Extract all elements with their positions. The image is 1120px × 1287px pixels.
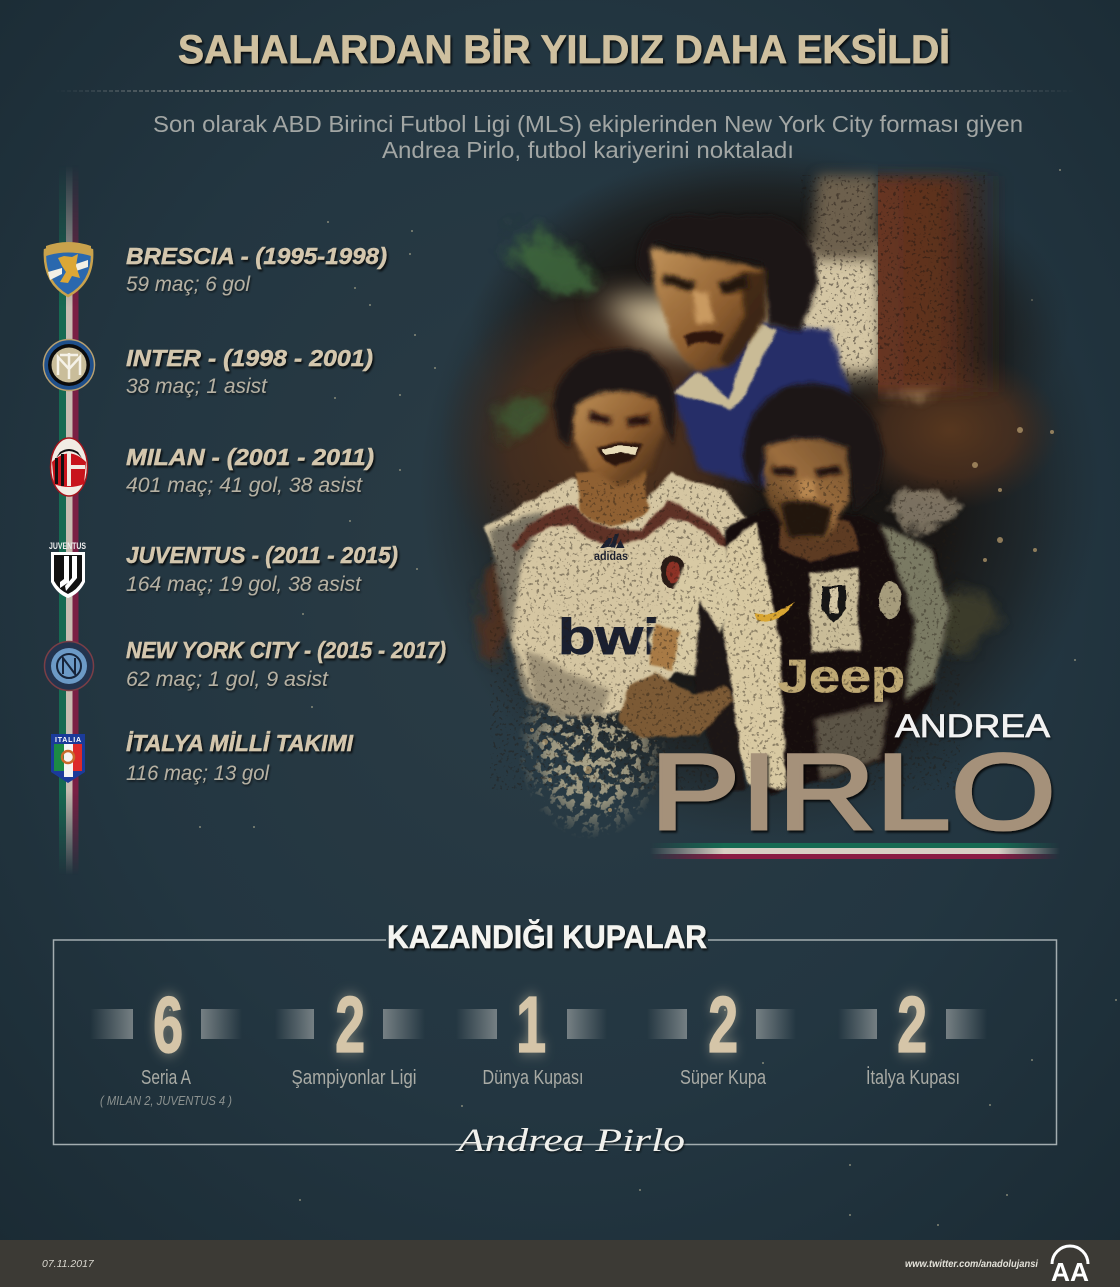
name: Pirlo: PIRLO [650,731,1056,852]
career: Milan [50,438,374,497]
trophy: Dünya Kupası: Dünya Kupası [482,1067,584,1089]
trophy: İtalya Kupası: İtalya Kupası [866,1066,960,1089]
stats: 401 maç; 41 gol, 38 asist [126,474,363,497]
stats: 59 maç; 6 gol [126,273,251,296]
panel frame [54,940,1056,1144]
trophy: Şampiyonlar Ligi: 2 [335,981,365,1070]
icon: Italy crest: ITALIA [55,737,81,744]
team name: INTER - (1998 - 2001) [126,345,373,371]
team name: İTALYA MİLLİ TAKIMI [126,730,353,756]
Milan shirt sponsor: bwi [558,609,660,665]
team name: JUVENTUS - (2011 - 2015) [126,542,398,568]
starry speckles [169,169,1117,1226]
trophy: Şampiyonlar Ligi [275,981,425,1089]
icon: Juventus crest [49,541,86,598]
trophy: Süper Kupa: 2 [708,981,738,1070]
splatter [530,427,1054,812]
Milan shirt brand: adidas [594,549,628,563]
trophy: Süper Kupa [647,981,796,1089]
panel heading: KAZANDIĞI KUPALAR [387,919,707,955]
footer bar [0,1240,1120,1287]
team name: NEW YORK CITY - (2015 - 2017) [126,637,446,663]
career: Italy [51,730,353,785]
footer [0,1240,1120,1287]
subtitle [153,111,1023,163]
signature: Andrea Pirlo [455,1123,685,1159]
icon: New York City crest [44,642,94,690]
trophy: Seria A [90,981,242,1108]
trophy: Şampiyonlar Ligi: Şampiyonlar Ligi [292,1067,416,1089]
photo collage: three Pirlo portraits [445,162,1066,836]
portrait: top head, blue shirt [638,216,850,490]
date: 07.11.2017 [42,1258,95,1270]
icon: Milan crest [50,438,88,496]
paint grit on shirts [490,480,960,790]
career: Brescia [45,242,387,296]
portrait: right head, Juventus shirt [722,383,950,795]
title: SAHALARDAN BİR YILDIZ DAHA EKSİLDİ [178,28,950,72]
Juventus shirt sponsor: Jeep [778,650,905,702]
timeline tricolor line [59,165,78,875]
icon: Inter crest [44,340,94,390]
subtitle: Andrea Pirlo, futbol kariyerini noktaladı [382,137,794,163]
trophy: Süper Kupa: Süper Kupa [680,1067,767,1089]
paint grit on flag band [800,175,985,385]
career: Inter [44,340,373,398]
icon: Brescia crest [45,242,92,296]
rust flag band [878,170,998,399]
stats: 164 maç; 19 gol, 38 asist [126,573,362,596]
portrait: left head, Milan shirt [484,349,771,716]
subtitle: Son olarak ABD Birinci Futbol Ligi (MLS) ekiplerinden New York City forması giyen [153,111,1023,137]
name: Andrea: ANDREA [895,708,1051,744]
trophy: Seria A: 6 [153,981,183,1070]
team name: MILAN - (2001 - 2011) [126,444,374,470]
twitter url: www.twitter.com/anadolujansi [905,1258,1039,1270]
trophy: Dünya Kupası: 1 [516,981,546,1070]
tricolor underline [650,843,1060,859]
icon: Anadolu Agency logo: AA [1051,1257,1089,1287]
trophy: Seria A: Seria A [141,1067,192,1089]
stats: 116 maç; 13 gol [126,762,270,785]
career: New York City [44,637,446,691]
trophy: İtalya Kupası [838,981,987,1089]
icon: Juventus crest: JUVENTUS [49,541,86,552]
stats: 38 maç; 1 asist [126,375,268,398]
stats: 62 maç; 1 gol, 9 asist [126,668,329,691]
collage backdrop [445,162,1066,808]
team name: BRESCIA - (1995-1998) [126,243,387,269]
trophy: Seria A: ( MILAN 2, JUVENTUS 4 ) [100,1093,232,1108]
icon: Italy crest [51,734,85,783]
career: Juventus [49,541,398,598]
panel: trophies [54,919,1056,1159]
lower-left cream paint splash [517,650,667,840]
title divider [55,90,1075,92]
portrait: sleeve, arm and hand [618,545,745,790]
trophy: Dünya Kupası [456,981,607,1089]
trophy: İtalya Kupası: 2 [897,981,927,1070]
